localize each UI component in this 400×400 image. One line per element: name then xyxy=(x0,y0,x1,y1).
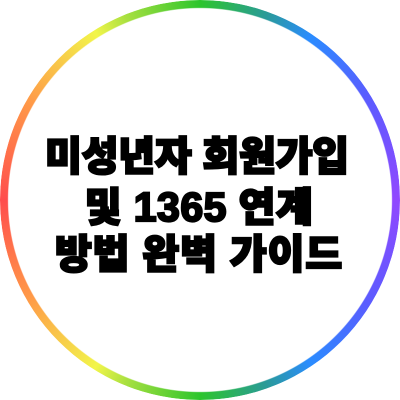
title line 3: 방법 완벽 가이드 xyxy=(55,222,343,280)
title xyxy=(45,124,349,280)
title line 1: 미성년자 회원가입 xyxy=(45,124,349,182)
title line 2: 및 1365 연계 xyxy=(85,175,313,233)
